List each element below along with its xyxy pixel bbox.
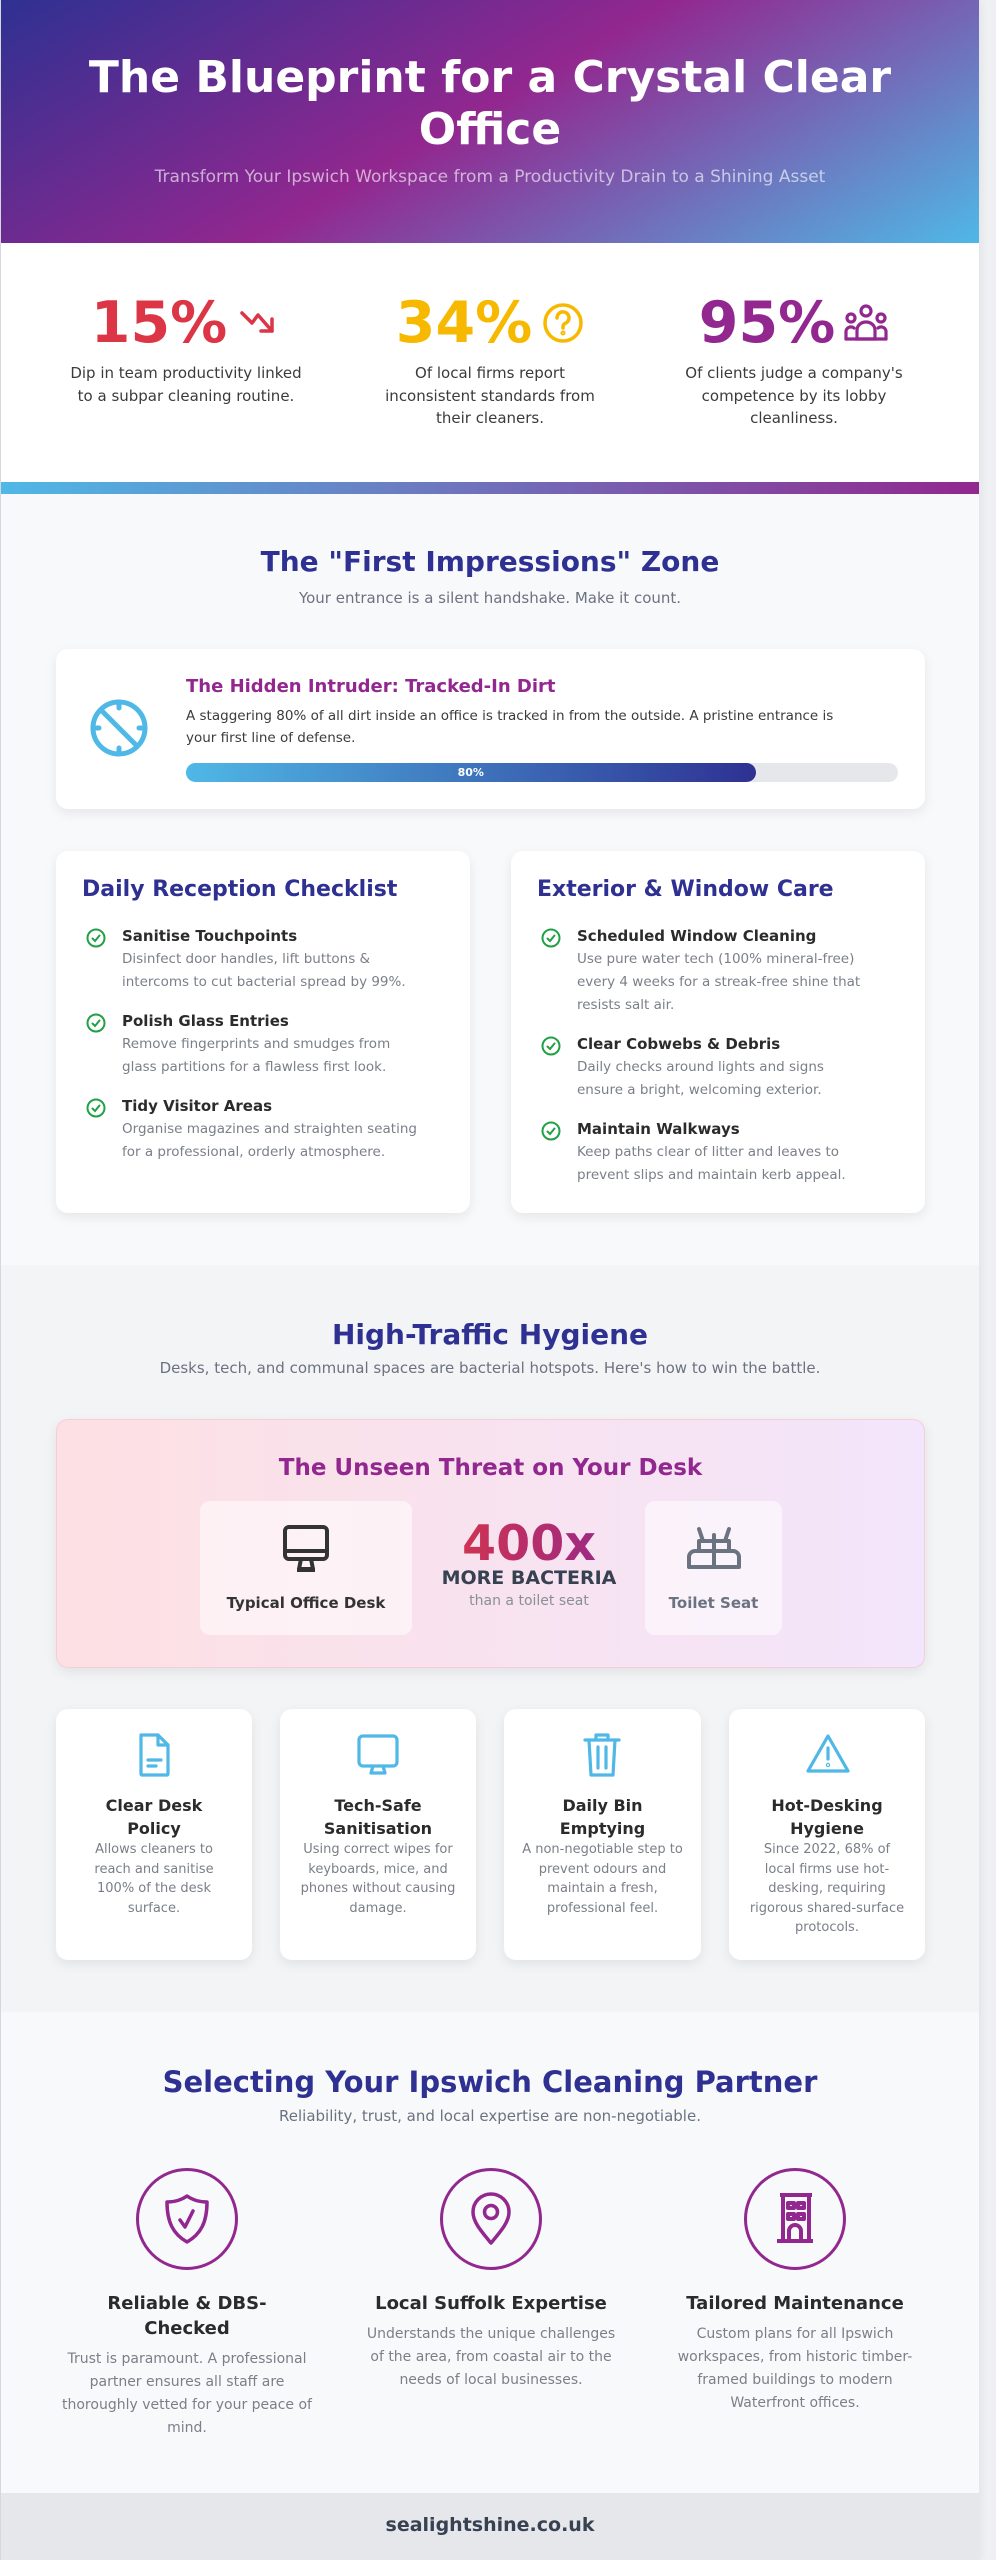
panel: daily reception checklist <box>56 851 470 1213</box>
stat: 95%: competence by its lobby <box>702 386 886 404</box>
card heading: Exterior & Window Care <box>537 877 834 902</box>
card: clear desk policy: Allows cleaners to reach and sanitise 100% of the desk surface. <box>94 1842 214 1916</box>
title: Office <box>419 104 561 155</box>
footer: sealightshine.co.uk <box>386 2514 594 2536</box>
stat: 15%: 15% <box>91 290 227 356</box>
text: needs of local businesses. <box>399 2372 583 2388</box>
callout text <box>186 708 833 746</box>
column: reliable & DBS-checked <box>62 2168 312 2436</box>
item: window cleaning: resists salt air. <box>577 997 674 1013</box>
stat: 34% <box>385 290 595 427</box>
card heading: Daily Reception Checklist <box>82 877 397 902</box>
icon: building <box>744 2168 846 2270</box>
section: high-traffic hygiene <box>1 1265 979 2012</box>
stat: 95%: Of clients judge a company's <box>685 364 903 382</box>
item: tidy visitor areas: Organise magazines and straighten seating <box>122 1121 417 1137</box>
box: toilet seat <box>645 1501 782 1635</box>
icon: toilet <box>687 1527 741 1569</box>
item: sanitise: intercoms to cut bacterial spread by 99%. <box>122 974 406 990</box>
box: office desk: Typical Office Desk <box>227 1594 385 1612</box>
heading: high-traffic hygiene: High-Traffic Hygiene <box>332 1318 648 1351</box>
column: tailored maintenance <box>678 2168 912 2411</box>
text: Trust is paramount. A professional partner ensures all staff are thoroughly vetted for your peace of mind. <box>62 2351 312 2436</box>
subheading: Desks, tech, and communal spaces are bacterial hotspots. Here's how to win the battle. <box>160 1359 820 1377</box>
card: tech-safe sanitisation: Using correct wipes for keyboards, mice, and phones without causing damage. <box>301 1842 455 1916</box>
item: cobwebs: Daily checks around lights and signs <box>577 1059 824 1075</box>
stat: 95%: 95% <box>699 290 835 356</box>
item: polish glass <box>86 1012 390 1075</box>
footer <box>1 2493 979 2560</box>
stat: 400x more bacteria: 400x <box>462 1515 596 1572</box>
item: cobwebs: ensure a bright, welcoming exterior. <box>577 1082 822 1098</box>
section: cleaning partner <box>1 2012 979 2493</box>
column: local suffolk expertise <box>367 2168 615 2388</box>
section: first impressions <box>1 494 979 1265</box>
stat: 15% <box>70 290 302 404</box>
card: clear desk policy <box>56 1709 252 1960</box>
heading: cleaning partner: Selecting Your Ipswich Cleaning Partner <box>163 2065 817 2099</box>
card: daily bin emptying: A non-negotiable step to prevent odours and maintain a fresh, professional feel. <box>522 1842 683 1916</box>
item: cobwebs <box>542 1035 824 1098</box>
item: window cleaning <box>542 927 860 1013</box>
stat: 400x more bacteria: MORE BACTERIA <box>442 1567 616 1589</box>
text: of the area, from coastal air to the <box>370 2349 612 2365</box>
header banner <box>1 0 979 243</box>
stat: 400x more bacteria: than a toilet seat <box>469 1593 589 1609</box>
callout heading: The Hidden Intruder: Tracked-In Dirt <box>186 676 556 697</box>
icon: bin <box>583 1733 621 1777</box>
item: tidy visitor areas: for a professional, orderly atmosphere. <box>122 1144 385 1160</box>
subheading: Your entrance is a silent handshake. Make it count. <box>299 589 681 607</box>
title <box>89 52 891 155</box>
item: window cleaning: Scheduled Window Cleaning <box>577 927 816 945</box>
callout text: A staggering 80% of all dirt inside an office is tracked in from the outside. A pristine entrance is <box>186 708 833 724</box>
item: sanitise: Sanitise Touchpoints <box>122 927 297 945</box>
card: hot-desking hygiene: Hot-Desking Hygiene <box>771 1796 883 1838</box>
icon: warning <box>806 1734 850 1773</box>
stat: 34%: inconsistent standards from <box>385 386 595 404</box>
stat: 34%: Of local firms report <box>415 364 565 382</box>
icon: no-entry clock <box>90 700 148 756</box>
card: daily bin emptying: Daily Bin Emptying <box>560 1796 645 1838</box>
icon: monitor <box>357 1734 399 1775</box>
subtitle: Transform Your Ipswich Workspace from a Productivity Drain to a Shining Asset <box>155 167 825 187</box>
stat: 34%: 34% <box>396 290 532 356</box>
threat heading: The Unseen Threat on Your Desk <box>279 1455 702 1481</box>
callout: tracked-in dirt <box>56 649 925 809</box>
progress bar 80%: 80% <box>458 766 484 779</box>
card: hot-desking hygiene: Since 2022, 68% of local firms use hot-desking, requiring rigorous shared-surface protocols. <box>750 1842 904 1935</box>
item: window cleaning: every 4 weeks for a streak-free shine that <box>577 974 860 990</box>
box: toilet seat: Toilet Seat <box>669 1594 758 1612</box>
item: tidy visitor areas <box>86 1097 417 1160</box>
card: hot-desking hygiene <box>729 1709 925 1960</box>
icon: shield <box>136 2168 238 2270</box>
stat: 95% <box>685 290 903 427</box>
item: sanitise: Disinfect door handles, lift buttons & <box>122 951 370 967</box>
stat: 15%: to a subpar cleaning routine. <box>78 386 294 404</box>
icon: location pin <box>440 2168 542 2270</box>
item: polish glass: Polish Glass Entries <box>122 1012 289 1030</box>
subheading: Reliability, trust, and local expertise are non-negotiable. <box>279 2107 701 2125</box>
stats panel <box>1 243 979 482</box>
item: sanitise <box>86 927 406 990</box>
card: clear desk policy: Clear Desk Policy <box>106 1796 202 1838</box>
title: The Blueprint for a Crystal Clear <box>89 52 891 103</box>
stat: 400x more bacteria <box>442 1515 616 1609</box>
text: Checked <box>144 2318 230 2339</box>
item: cobwebs: Clear Cobwebs & Debris <box>577 1035 780 1053</box>
icon: monitor <box>283 1525 329 1572</box>
item: window cleaning: Use pure water tech (100% mineral-free) <box>577 951 854 967</box>
text: Local Suffolk Expertise <box>375 2293 607 2314</box>
box: office desk <box>200 1501 412 1635</box>
panel: unseen threat <box>56 1419 925 1668</box>
icon: document <box>139 1733 170 1777</box>
text: Tailored Maintenance <box>686 2293 904 2314</box>
panel: exterior & window care <box>511 851 925 1213</box>
item: walkways: Keep paths clear of litter and leaves to <box>577 1144 839 1160</box>
stat: 95%: cleanliness. <box>750 409 838 427</box>
progress bar 80% <box>186 763 898 782</box>
stat: 15%: Dip in team productivity linked <box>70 364 302 382</box>
text: Reliable & DBS- <box>107 2293 267 2314</box>
item: walkways: Maintain Walkways <box>577 1120 740 1138</box>
stat: 34%: their cleaners. <box>436 409 544 427</box>
text: Custom plans for all Ipswich workspaces, from historic timber-framed buildings to modern Waterfront offices. <box>678 2326 912 2411</box>
item: walkways: prevent slips and maintain kerb appeal. <box>577 1167 846 1183</box>
card: daily bin emptying <box>504 1709 701 1960</box>
item: walkways <box>542 1120 846 1183</box>
card: tech-safe sanitisation: Tech-Safe Sanitisation <box>324 1796 432 1838</box>
item: polish glass: glass partitions for a flawless first look. <box>122 1059 386 1075</box>
item: polish glass: Remove fingerprints and smudges from <box>122 1036 390 1052</box>
callout text: your first line of defense. <box>186 730 355 746</box>
text: Understands the unique challenges <box>367 2326 615 2342</box>
card: tech-safe sanitisation <box>280 1709 476 1960</box>
item: tidy visitor areas: Tidy Visitor Areas <box>122 1097 272 1115</box>
heading: first impressions: The "First Impressions" Zone <box>261 545 719 578</box>
